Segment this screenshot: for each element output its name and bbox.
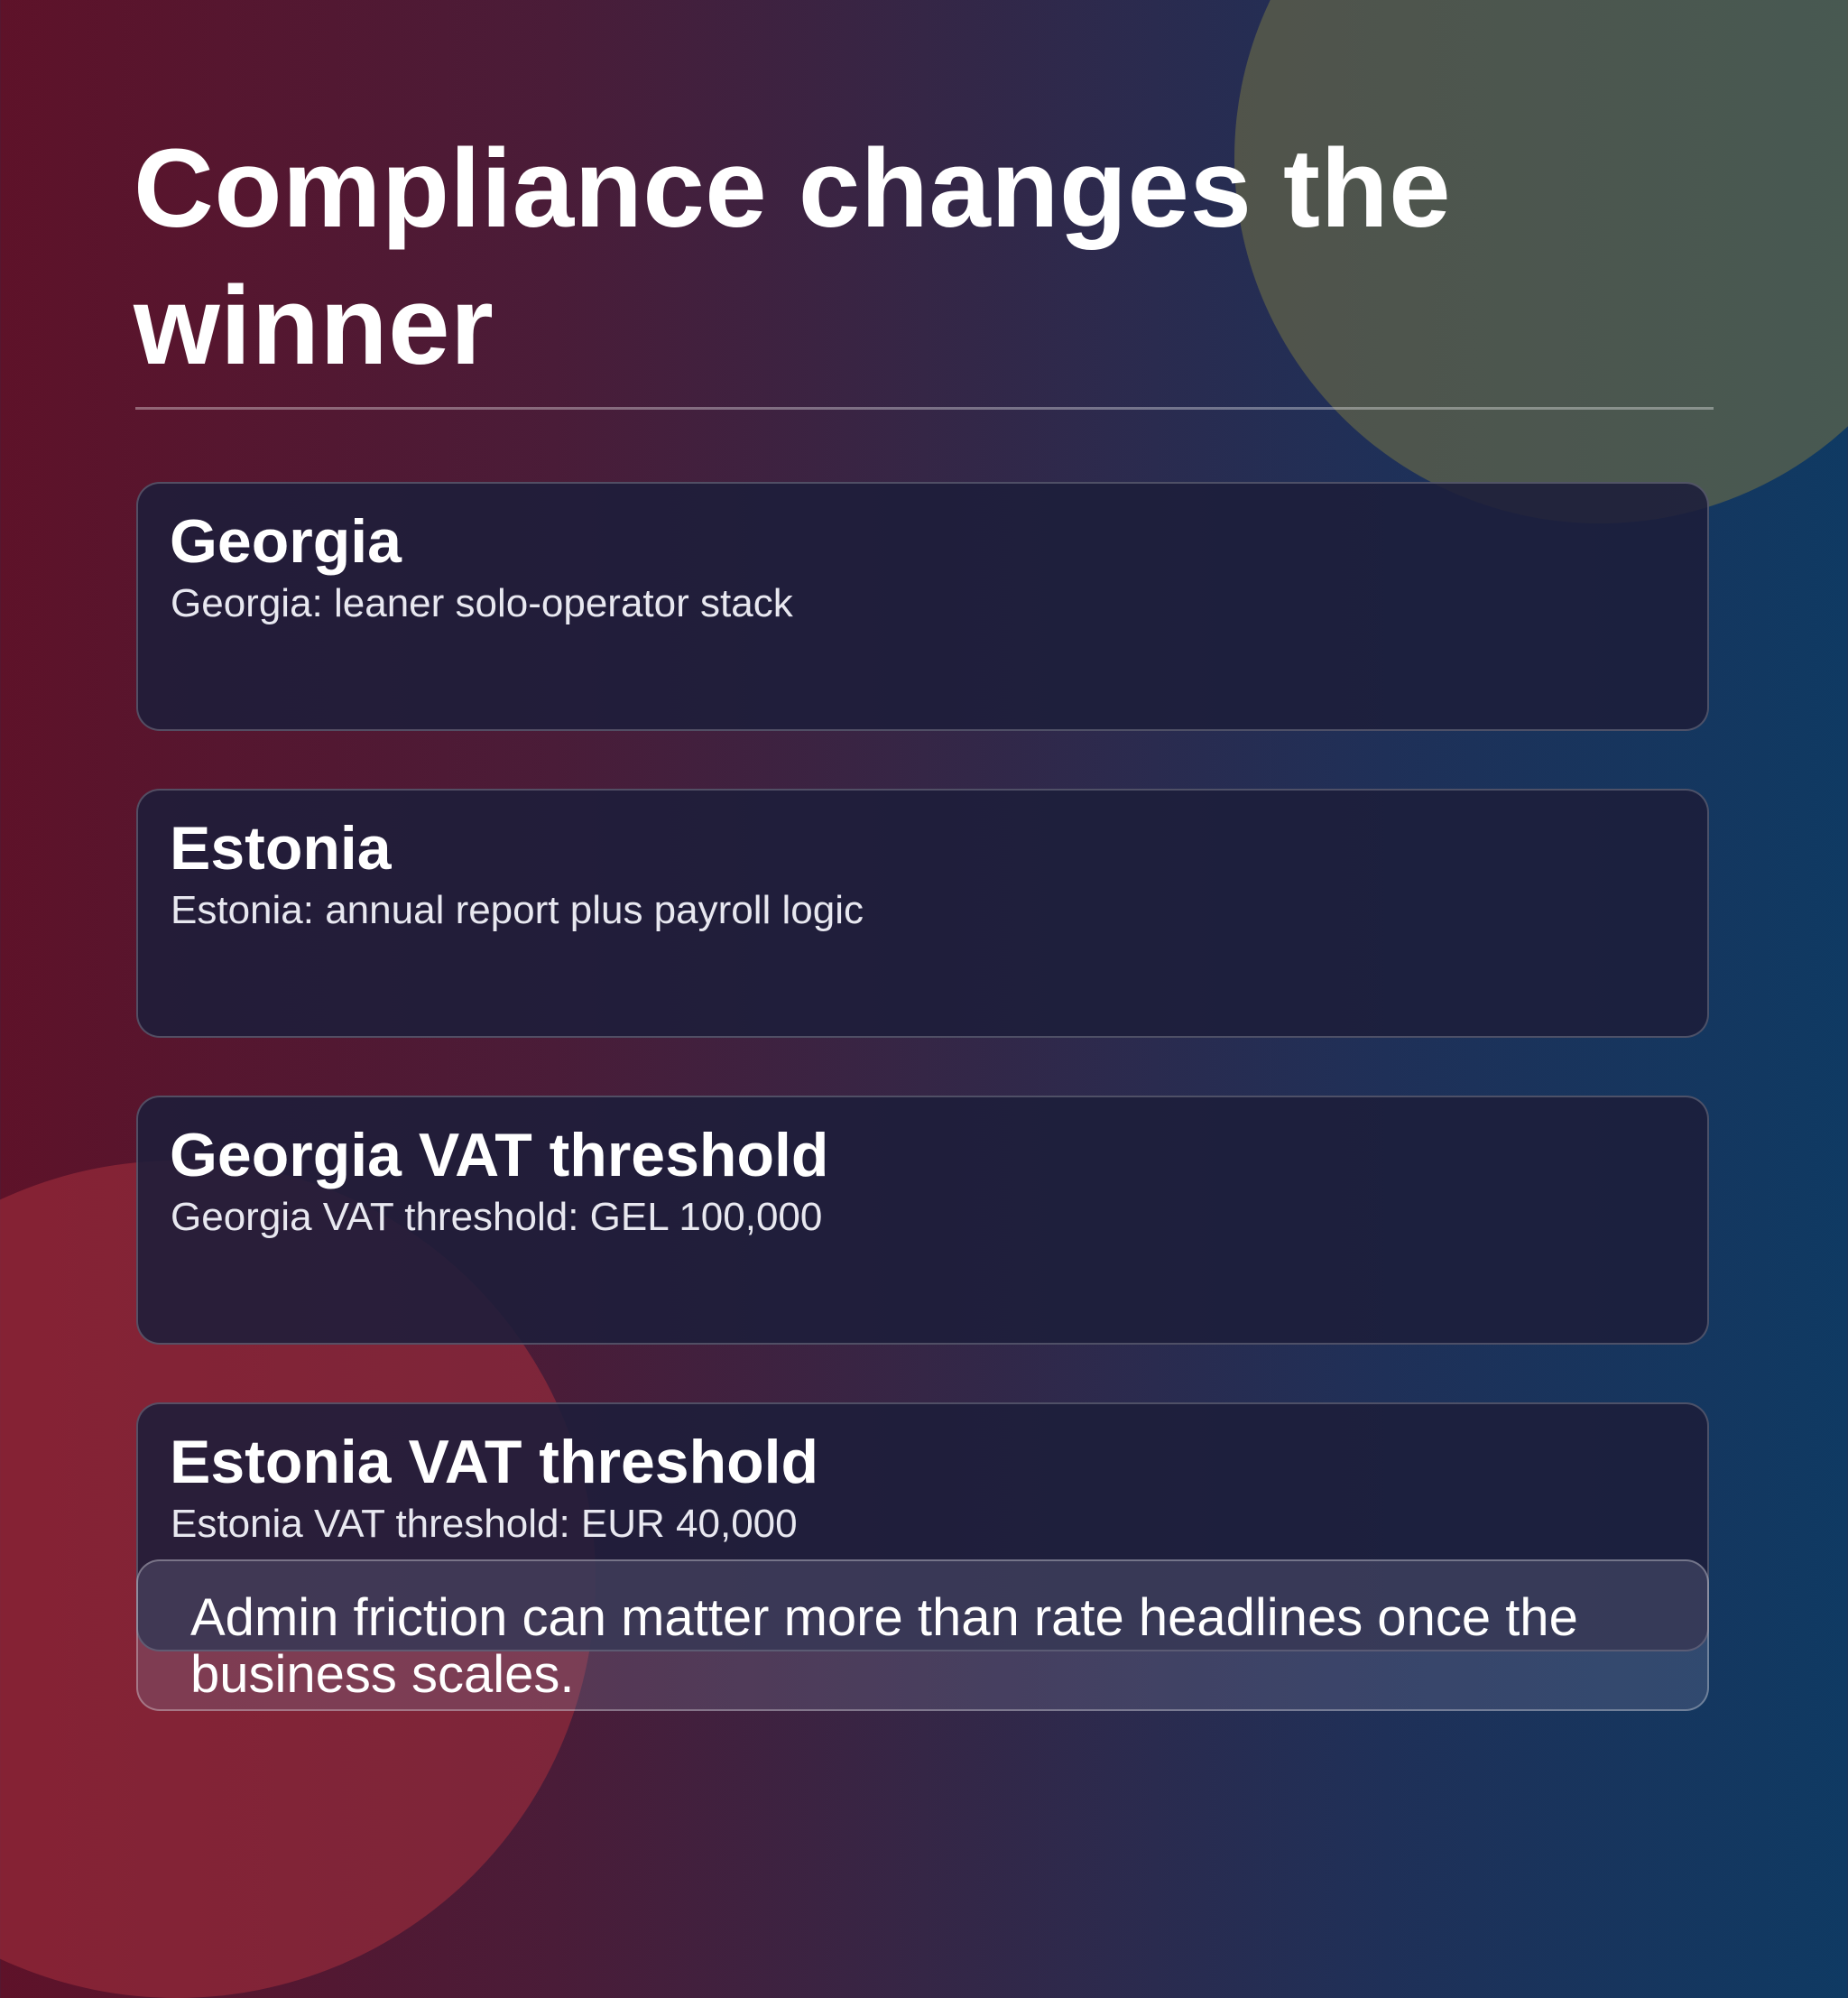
card heading: Estonia VAT threshold	[170, 1428, 818, 1496]
card: Georgia	[136, 482, 1709, 731]
card text: Estonia: annual report plus payroll logic	[171, 888, 864, 932]
card: Georgia VAT threshold	[136, 1096, 1709, 1345]
title: Compliance changes the winner	[134, 127, 1451, 388]
decorative circle: bottom left	[0, 1161, 596, 1998]
decorative circle: top right	[1234, 0, 1848, 523]
card text: Georgia VAT threshold: GEL 100,000	[171, 1195, 822, 1239]
card heading: Georgia	[170, 507, 402, 576]
card: Estonia	[136, 789, 1709, 1038]
card heading: Georgia VAT threshold	[170, 1121, 828, 1189]
callout text: Admin friction can matter more than rate headlines once the business scales.	[190, 1588, 1578, 1704]
card heading: Estonia	[170, 814, 392, 883]
card: Estonia VAT threshold	[136, 1402, 1709, 1651]
card text: Georgia: leaner solo-operator stack	[171, 581, 793, 625]
callout	[136, 1559, 1709, 1711]
card text: Estonia VAT threshold: EUR 40,000	[171, 1502, 798, 1546]
